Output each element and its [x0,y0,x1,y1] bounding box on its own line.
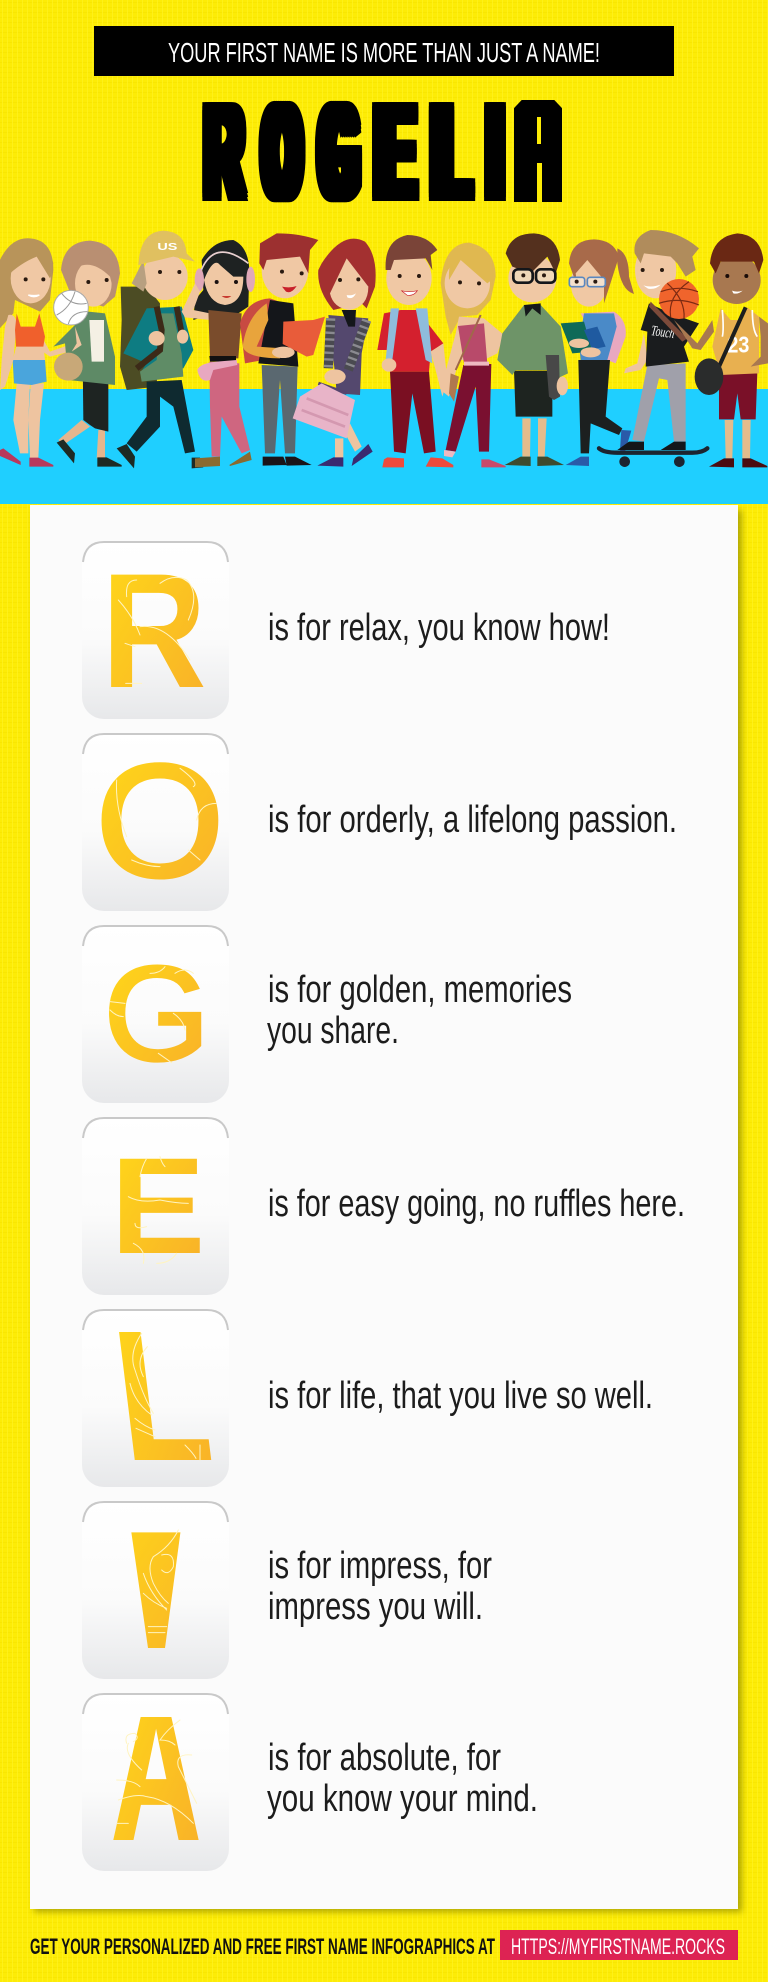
tile A [82,1693,229,1871]
person 1: girl in orange top [0,238,82,467]
description I: is for impress, for [268,1545,492,1587]
letter L: L [104,1292,221,1500]
tile R [82,541,229,719]
person 3: boy with backpack and cap: US [157,242,178,253]
person 6: girl with pink bag [293,239,376,467]
description A: is for absolute, for [268,1737,501,1779]
letter E: E [111,1129,205,1282]
person 7: boy in red shirt [377,235,453,467]
person 3: boy with backpack and cap [117,231,203,468]
description G [267,969,572,1052]
letter row O [82,732,677,911]
letter row G [82,925,572,1103]
letter A: A [112,1658,200,1881]
person 11: boy on skateboard with basketball [599,230,707,467]
white panel drop shadow [34,510,742,1912]
description I [268,1545,492,1628]
title: name ROGELIA: O [264,78,300,225]
tile O [82,733,229,911]
description A: you know your mind. [267,1778,538,1820]
person 10: girl with ponytail and tablet [561,239,634,466]
letter row A [82,1693,536,1871]
letter O: O [96,732,224,910]
description R: is for relax, you know how! [268,607,610,649]
title: name ROGELIA: E [377,78,413,225]
tile G [82,925,229,1103]
tile I [82,1501,229,1679]
description G: is for golden, memories [268,969,572,1011]
description A [267,1737,538,1820]
letter row I [82,1496,492,1684]
group of people illustration [0,230,768,468]
header banner [94,26,674,76]
person 9: boy with glasses and green sweater [497,233,568,466]
letter row R [82,539,610,722]
description I: impress you will. [268,1586,483,1628]
title: name ROGELIA: G [320,78,357,225]
letter I [131,1530,180,1648]
letter row L [82,1292,653,1500]
letter G: G [104,939,210,1088]
title: name ROGELIA: A [521,78,555,225]
person 4: girl with headphones [182,240,255,467]
person 5: boy reading a book [240,233,325,466]
description G: you share. [267,1010,399,1052]
letter I: I [97,1496,214,1684]
description L: is for life, that you live so well. [268,1375,653,1417]
person 11: boy on skateboard with basketball: Touch [650,323,675,342]
person 12: boy in yellow tank top: 23 [727,332,749,358]
letter row E [82,1117,685,1295]
title: name ROGELIA: R [204,78,244,225]
person 12: boy in yellow tank top [674,233,768,467]
title: name ROGELIA [202,78,562,225]
blue floor band [0,389,768,504]
white content panel [30,505,738,1909]
title: name ROGELIA: I [488,78,502,225]
tile L [82,1309,229,1487]
people left half [0,231,376,468]
letter A [113,1717,199,1840]
people right half [377,230,768,467]
person 2: girl with volleyball [53,241,122,467]
letter R: R [101,539,206,722]
tile E [82,1117,229,1295]
footer call to action: GET YOUR PERSONALIZED AND FREE FIRST NAME INFOGRAPHICS AT [30,1934,495,1959]
basketball [659,279,699,319]
person 8: blonde girl [441,243,506,467]
title: name ROGELIA: L [434,78,468,225]
